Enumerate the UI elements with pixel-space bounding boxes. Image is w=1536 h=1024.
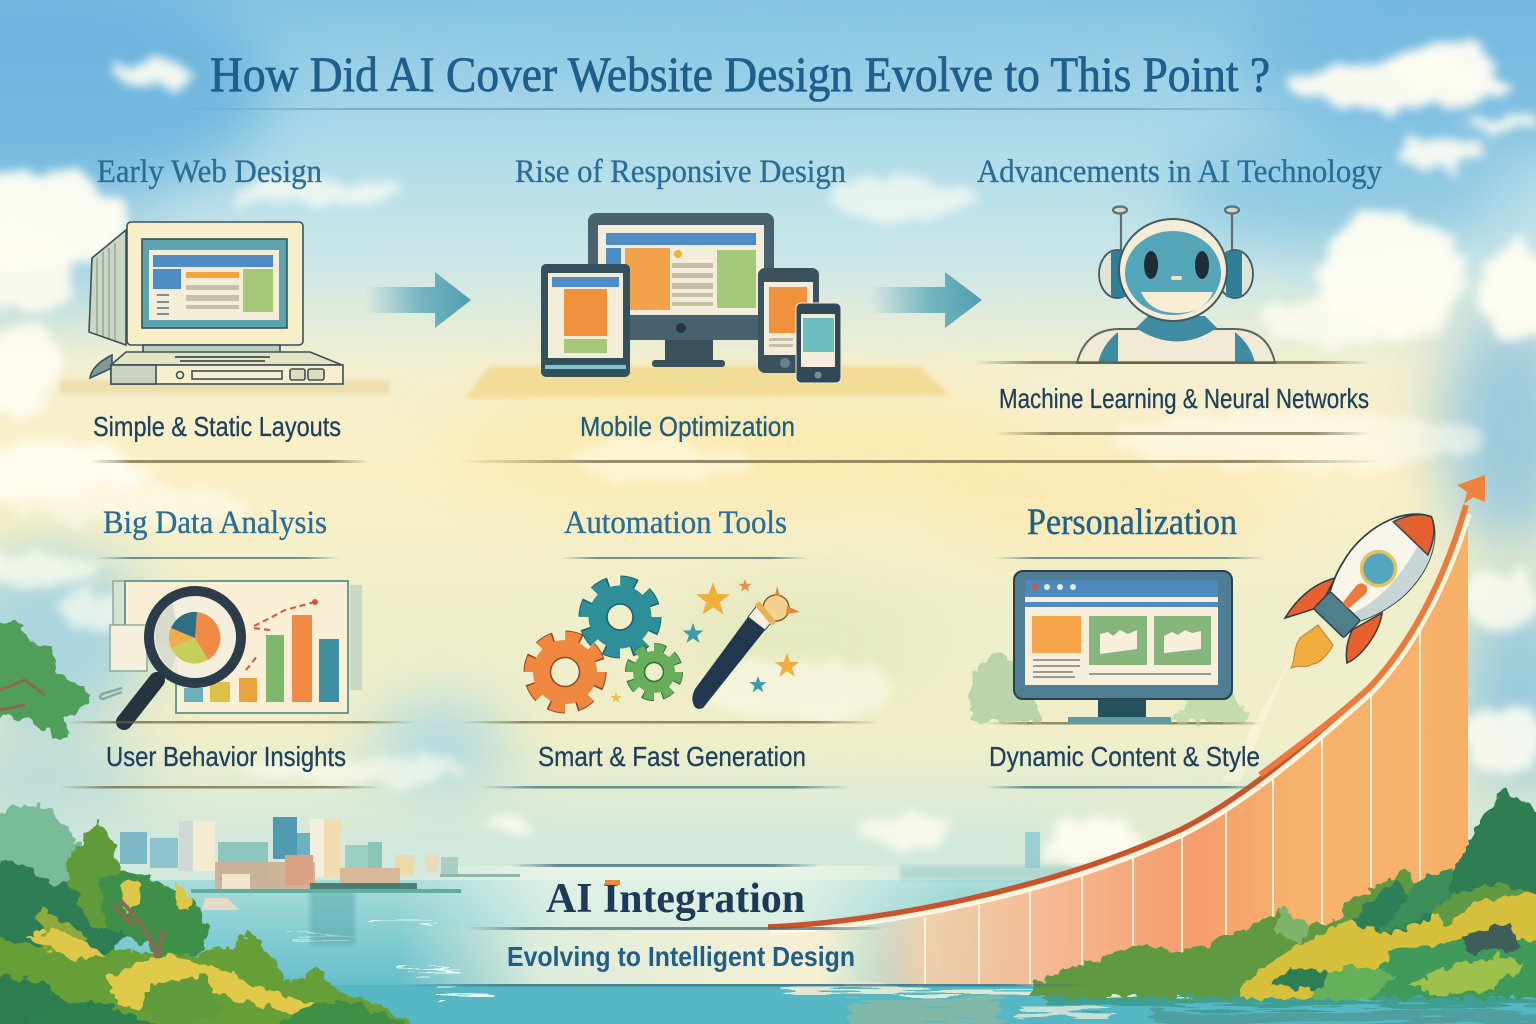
icon: rocket <box>1285 492 1457 668</box>
heading: Advancements in AI Technology: Advancements in AI Technology <box>977 154 1382 190</box>
caption: User Behavior Insights: User Behavior Insights <box>106 741 346 772</box>
panel: Rise of Responsive Design <box>465 154 950 442</box>
icon: small phone <box>796 303 841 383</box>
heading: Big Data Analysis: Big Data Analysis <box>103 505 327 541</box>
icon: retro computer <box>89 222 343 384</box>
icon: orange gear <box>530 637 600 707</box>
icon: magnifier with pie chart <box>124 591 241 722</box>
caption: Machine Learning & Neural Networks: Machine Learning & Neural Networks <box>999 383 1369 414</box>
desk band <box>465 366 950 398</box>
chart: bar chart with trend line <box>100 581 362 713</box>
icon: phone <box>758 268 819 373</box>
icon: green gear <box>630 648 678 696</box>
caption: Mobile Optimization: Mobile Optimization <box>580 411 795 442</box>
icon: magic brush with stars <box>610 579 800 709</box>
caption: Simple & Static Layouts: Simple & Static Layouts <box>93 411 341 442</box>
desk band <box>60 380 390 394</box>
icon: teal gear <box>585 582 655 652</box>
panel: Automation Tools <box>530 505 806 772</box>
panel: Early Web Design <box>60 154 390 442</box>
icon: robot <box>1077 206 1275 363</box>
heading: Personalization: Personalization <box>1027 502 1237 543</box>
heading: Rise of Responsive Design: Rise of Responsive Design <box>515 154 846 190</box>
icon: personalized site monitor <box>1014 571 1232 723</box>
panel: Advancements in AI Technology <box>977 154 1382 414</box>
callout: AI Integration: AI Integration <box>546 876 805 922</box>
caption: Evolving to Intelligent Design: Evolving to Intelligent Design <box>507 941 855 972</box>
left foliage <box>0 804 425 1024</box>
icon: tablet <box>541 264 630 377</box>
mid-left tree <box>0 622 92 735</box>
arrow: early to responsive <box>366 272 471 328</box>
heading: Early Web Design: Early Web Design <box>97 154 322 190</box>
background trees behind monitor <box>970 650 1250 722</box>
left tree trunk <box>112 900 165 958</box>
title: How Did AI Cover Website Design Evolve to This Point ? <box>210 46 1270 102</box>
right foliage <box>1033 790 1536 1000</box>
arrow: responsive to AI <box>870 272 982 328</box>
caption: Smart & Fast Generation: Smart & Fast Generation <box>538 741 806 772</box>
icon: desktop monitor <box>588 213 774 367</box>
caption: Dynamic Content & Style: Dynamic Content & Style <box>989 741 1260 772</box>
panel: Big Data Analysis <box>100 505 362 772</box>
city skyline <box>120 817 520 910</box>
growth curve area chart <box>768 475 1485 984</box>
arrowhead <box>1457 475 1485 504</box>
river and shoreline <box>0 832 1536 1024</box>
heading: Automation Tools: Automation Tools <box>564 505 787 541</box>
rocket exhaust trail <box>1222 660 1290 782</box>
panel: Personalization <box>970 502 1260 772</box>
